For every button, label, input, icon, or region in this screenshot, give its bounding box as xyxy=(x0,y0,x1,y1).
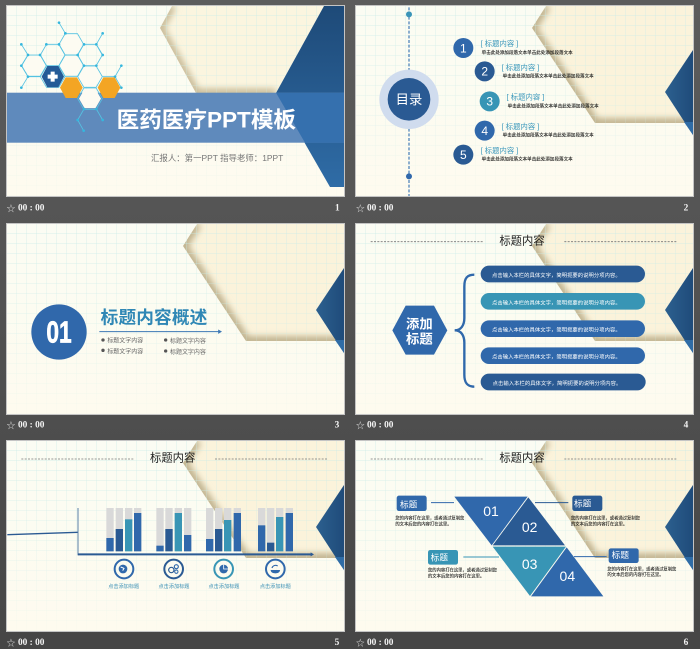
item 5: 单击此处添加段落文本单击此处添加段落文本 xyxy=(482,155,573,162)
triangle 03: 03 xyxy=(522,556,538,572)
footer 3: 00 : 00 xyxy=(18,421,45,431)
triangle 04: 04 xyxy=(560,568,575,584)
callout 2: 标题 xyxy=(574,497,592,508)
item 1: [ 标题内容 ] xyxy=(481,39,518,48)
bullet list: 标题文字内容 xyxy=(170,348,206,356)
triangle 04 xyxy=(531,547,603,596)
footer 1 xyxy=(7,203,340,213)
item 2 xyxy=(475,61,594,81)
hexagon title: 添加 xyxy=(406,316,433,331)
panel: slide 4 brace list xyxy=(356,224,694,431)
item 4: [ 标题内容 ] xyxy=(502,122,539,131)
item 2: 2 xyxy=(481,65,488,79)
pill 4: 点击输入本栏的具体文字，简明扼要的说明分项内容。 xyxy=(492,352,621,360)
heading rule xyxy=(99,330,221,333)
item 3 xyxy=(480,91,599,111)
footer 2 xyxy=(356,203,689,213)
icon: globe xyxy=(115,560,133,578)
bar group 1 xyxy=(106,508,141,551)
bullet list: 标题文字内容 xyxy=(107,337,143,345)
brace xyxy=(455,275,474,387)
captions: 点击添加标题 xyxy=(209,582,239,590)
contents badge: 目录 xyxy=(396,92,422,107)
pill 2 xyxy=(481,293,645,310)
hexagon cluster over band xyxy=(7,66,340,213)
footer 4: ☆ xyxy=(356,421,365,431)
footer 4 xyxy=(356,421,689,431)
callout 3: 标题 xyxy=(431,551,448,562)
item 5 xyxy=(453,145,573,165)
triangle 03 xyxy=(493,547,566,596)
footer 2: 00 : 00 xyxy=(367,203,394,213)
panel: slide 3 section xyxy=(6,224,344,431)
icon: medical cross hexagon xyxy=(42,66,64,87)
icon: pie xyxy=(214,560,233,578)
item 4: 单击此处添加段落文本单击此处添加段落文本 xyxy=(503,132,594,139)
callout 4 xyxy=(607,548,677,578)
callout 1 xyxy=(395,496,465,527)
triangle 02: 02 xyxy=(522,519,538,535)
connector lines xyxy=(431,503,607,557)
triangle 01: 01 xyxy=(483,503,499,519)
pill 5: 点击输入本栏的具体文字，简明扼要的说明分项内容。 xyxy=(493,379,621,387)
pill 1 xyxy=(481,266,645,282)
panel: slide 5 bar chart xyxy=(6,440,344,648)
footer 1: 1 xyxy=(335,203,340,213)
footer 6 xyxy=(356,638,689,648)
footer 2: 2 xyxy=(684,203,689,213)
item 4: 4 xyxy=(481,124,488,138)
callout 4: 您的内容打在这里，或者通过复制您 xyxy=(607,565,677,572)
callout 2 xyxy=(571,496,641,527)
callout 4: 的文本后您的内容打在这里。 xyxy=(607,571,664,578)
callout 3: 您的内容打在这里，或者通过复制您 xyxy=(428,566,498,573)
left connector line xyxy=(7,532,78,535)
timeline dot top xyxy=(406,11,412,17)
captions: 点击添加标题 xyxy=(108,582,139,590)
item 4 xyxy=(475,121,594,141)
item 2: [ 标题内容 ] xyxy=(502,63,539,72)
item 5: 5 xyxy=(460,148,467,162)
timeline dot bottom xyxy=(406,173,412,179)
pill 5 xyxy=(481,374,646,390)
slide 5 background xyxy=(6,440,344,632)
callout 2: 的文本后您的内容打在这里。 xyxy=(571,520,627,527)
section number badge xyxy=(31,304,87,360)
captions: 点击添加标题 xyxy=(159,582,189,590)
footer 6: 00 : 00 xyxy=(367,638,394,648)
presenter line: 汇报人：第一PPT 指导老师：1PPT xyxy=(151,153,283,163)
footer 3: 3 xyxy=(335,421,340,431)
slide 1 background xyxy=(6,6,344,196)
panel: slide 2 contents xyxy=(356,6,694,213)
main title: 医药医疗PPT模板 xyxy=(117,107,296,132)
bar group 3 xyxy=(206,508,241,551)
callout 3: 的文本后您的内容打在这里。 xyxy=(428,572,484,579)
slide 2 background xyxy=(356,6,694,196)
callout 1: 标题 xyxy=(400,498,418,509)
contents badge xyxy=(379,70,439,129)
item 1: 单击此处添加段落文本单击此处添加段落文本 xyxy=(482,49,573,56)
bullet list: 标题文字内容 xyxy=(170,337,206,345)
slide 3 background xyxy=(6,224,344,414)
pill 4 xyxy=(481,347,645,364)
footer 4: 4 xyxy=(684,421,689,431)
slide 6 heading: 标题内容 xyxy=(499,451,545,465)
footer 1: 00 : 00 xyxy=(18,203,45,213)
section number badge: 01 xyxy=(46,316,72,350)
footer 4: 00 : 00 xyxy=(367,421,394,431)
icon: orange hexagon right xyxy=(98,77,120,98)
panel: slide 6 triangles xyxy=(356,440,694,648)
pill 1: 点击输入本栏的具体文字，简明扼要的说明分项内容。 xyxy=(492,271,621,279)
footer 5: 00 : 00 xyxy=(18,638,45,648)
bullet list xyxy=(101,337,206,356)
molecule hexagon graphic xyxy=(20,21,123,89)
footer 6: 6 xyxy=(684,638,689,648)
hexagon title: 标题 xyxy=(406,331,433,346)
slide 5 heading: 标题内容 xyxy=(150,451,195,465)
item 1 xyxy=(453,38,573,58)
lower molecule stems xyxy=(76,108,104,132)
icon: white hexagon xyxy=(78,88,102,109)
slide 4 heading: 标题内容 xyxy=(499,233,545,247)
chart axes xyxy=(78,508,314,556)
timeline dashed line xyxy=(407,7,411,196)
callout 4: 标题 xyxy=(612,549,629,560)
slide 4 background xyxy=(356,224,694,414)
pill 2: 点击输入本栏的具体文字，简明扼要的说明分项内容。 xyxy=(492,298,621,306)
captions xyxy=(108,582,291,590)
pill 3 xyxy=(481,320,645,337)
footer 5 xyxy=(7,638,340,648)
section heading: 标题内容概述 xyxy=(101,307,208,328)
callout 1: 您的内容打在这里，或者通过复制您 xyxy=(395,515,465,522)
icon: gears xyxy=(164,560,183,578)
bullet list: 标题文字内容 xyxy=(107,347,143,355)
item 3: 3 xyxy=(486,95,493,109)
item 1: 1 xyxy=(460,41,467,55)
pill 3: 点击输入本栏的具体文字，简明扼要的说明分项内容。 xyxy=(492,325,621,333)
callout 1: 的文本后您的内容打在这里。 xyxy=(395,520,452,527)
footer 1: ☆ xyxy=(7,203,16,213)
title band xyxy=(7,93,344,143)
footer 6: ☆ xyxy=(356,638,365,648)
icon: gauge xyxy=(266,560,285,578)
icon: orange hexagon left xyxy=(60,77,83,98)
footer 5: 5 xyxy=(335,638,340,648)
captions: 点击添加标题 xyxy=(260,582,291,590)
footer 3: ☆ xyxy=(7,421,16,431)
callout 3 xyxy=(428,550,498,579)
item 3: 单击此处添加段落文本单击此处添加段落文本 xyxy=(508,102,599,109)
callout 2: 您的内容打在这里，或者通过复制您 xyxy=(571,515,641,522)
footer 5: ☆ xyxy=(7,638,16,648)
item 5: [ 标题内容 ] xyxy=(481,146,518,155)
hexagon title xyxy=(392,306,447,355)
slide 6 background xyxy=(356,440,694,632)
triangle 02 xyxy=(493,497,565,545)
triangle 01 xyxy=(454,497,528,545)
footer 3 xyxy=(7,421,340,431)
bar group 2 xyxy=(156,508,191,551)
item 2: 单击此处添加段落文本单击此处添加段落文本 xyxy=(503,72,594,79)
item 3: [ 标题内容 ] xyxy=(507,93,544,102)
band over blue shape xyxy=(276,93,344,143)
bar group 4 xyxy=(258,508,293,551)
footer 2: ☆ xyxy=(356,203,365,213)
panel: slide 1 cover xyxy=(6,6,344,213)
